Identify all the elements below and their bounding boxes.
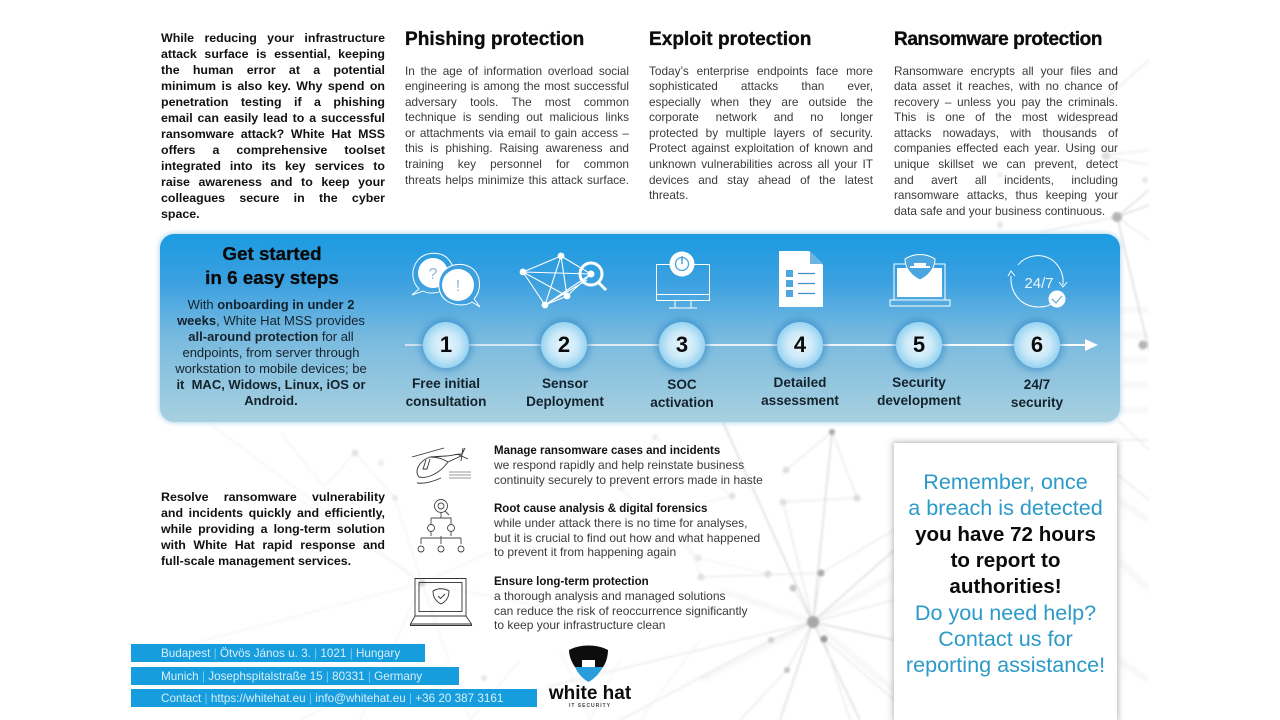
heading: phishing protection: Phishing protection [405, 28, 584, 50]
panel description: it MAC, Widows, Linux, iOS or [176, 377, 366, 392]
text: root cause analysis: Root cause analysis & digital forensics [494, 502, 707, 514]
icon: monitor with power button [656, 252, 710, 308]
rapid response paragraph [161, 490, 385, 568]
step 2 label: Deployment [526, 394, 604, 409]
callout text: remember [908, 468, 1103, 520]
logo shield [569, 646, 608, 682]
panel description [175, 297, 367, 408]
intro paragraph: the human error at a potential [161, 63, 385, 77]
callout text: remember: a breach is detected [908, 495, 1103, 520]
text: phishing protection: technique is sending out malicious links [405, 110, 629, 124]
callout card [894, 443, 1117, 720]
text: manage ransomware cases [494, 444, 763, 487]
intro paragraph [161, 31, 385, 221]
logo wordmark: white hat [549, 683, 631, 704]
step 5 label [877, 375, 961, 408]
step 6 number [1014, 322, 1060, 368]
icon: question and exclamation bubbles: ! [456, 278, 460, 295]
step 3 label [650, 376, 714, 410]
rapid response paragraph: and incidents quickly and efficiently, [161, 506, 385, 520]
text: exploit protection: protected by multiple layers of security. [649, 126, 873, 140]
icon: helicopter [412, 448, 471, 484]
panel title [205, 243, 339, 288]
intro paragraph: ransomware attack? White Hat MSS [161, 127, 385, 141]
step 5 number: 5 [913, 332, 925, 357]
step 1 label [406, 376, 486, 409]
step 6 number: 6 [1031, 332, 1043, 357]
intro paragraph: minimum is also key. Why spend on [161, 79, 385, 93]
step 2 label: Sensor [542, 376, 588, 391]
text: ensure long-term protection: a thorough analysis and managed solutions [494, 589, 726, 603]
step 1 number [423, 322, 469, 368]
step 4 number: 4 [794, 332, 806, 357]
text: ransomware protection: data safe and your business continuous. [894, 204, 1105, 218]
step 1 label: consultation [406, 394, 486, 409]
rapid response paragraph: Resolve ransomware vulnerability [161, 490, 385, 504]
rapid response paragraph: with White Hat rapid response and [161, 538, 385, 552]
icon: checklist document [779, 251, 823, 307]
text: exploit protection: threats. [649, 188, 688, 202]
text: manage ransomware cases: Manage ransomware cases and incidents [494, 444, 720, 456]
text: phishing protection: engineering is among the most successful [405, 79, 629, 93]
intro paragraph: attack surface is essential, keeping [161, 47, 385, 61]
callout text: 72 hours: authorities! [949, 575, 1062, 598]
contact bar: Munich: Munich | Josephspitalstraße 15 | 80331 | Germany [161, 670, 422, 682]
icon: laptop with shield outline [410, 578, 472, 626]
text: phishing protection: training key personnel for common [405, 157, 629, 171]
panel background [160, 234, 1120, 422]
heading: ransomware protection: Ransomware protection [894, 28, 1102, 50]
step 5 label: development [877, 393, 961, 408]
intro paragraph: colleagues secure in the cyber [161, 191, 385, 205]
text: exploit protection: Today’s enterprise endpoints face more [649, 64, 873, 78]
callout text: 72 hours: to report to [951, 549, 1060, 572]
panel description: weeks, White Hat MSS provides [177, 313, 365, 328]
panel description: Android. [244, 393, 298, 408]
text: ensure long-term protection: to keep your infrastructure clean [494, 618, 665, 632]
icon: 24/7 cycle with check [1008, 255, 1068, 308]
contact bar: Budapest [131, 644, 425, 662]
text: ransomware protection [894, 64, 1118, 218]
step 3 label: SOC [667, 376, 697, 392]
text: phishing protection: or attachments via email to gain access – [405, 126, 629, 140]
callout text: 72 hours [915, 523, 1096, 598]
text: root cause analysis: to prevent it from happening again [494, 545, 676, 559]
step 4 label [761, 375, 839, 408]
text: exploit protection: devices and stay ahead of the latest [649, 173, 873, 187]
icon: network with magnifier [520, 252, 607, 308]
panel description: endpoints, from server through [182, 345, 360, 360]
callout text: contact us: Do you need help? [915, 600, 1096, 624]
intro paragraph: While reducing your infrastructure [161, 31, 385, 45]
logo tagline: IT SECURITY [569, 703, 611, 709]
icon: 24/7 cycle with check: 24/7 [1024, 275, 1054, 292]
text: exploit protection: Protect against exploitation of known and [649, 141, 873, 155]
text: manage ransomware cases: continuity securely to prevent errors made in haste [494, 473, 763, 487]
step 1 label: Free initial [412, 376, 480, 391]
text: phishing protection: this is phishing. Raising awareness and [405, 141, 629, 155]
icon: root cause tree [418, 499, 464, 552]
timeline arrow [405, 339, 1098, 351]
step 3 number: 3 [676, 332, 688, 357]
panel description: With onboarding in under 2 [188, 297, 354, 312]
panel description: workstation to mobile devices; be [175, 361, 367, 376]
intro paragraph: raise awareness and to keep your [161, 175, 385, 189]
contact bar: Munich [131, 666, 459, 684]
text: root cause analysis [494, 502, 760, 559]
text: root cause analysis: but it is crucial to find out how and what happened [494, 531, 760, 545]
callout text: contact us: reporting assistance! [906, 652, 1105, 677]
step 4 label: Detailed [774, 375, 826, 390]
step 6 label: security [1011, 395, 1063, 410]
text: exploit protection: sophisticated attacks than ever, [649, 79, 873, 93]
intro paragraph: integrated into its key services to [161, 159, 385, 173]
panel description: all-around protection for all [188, 329, 354, 344]
panel title: Get started [222, 243, 322, 264]
intro paragraph: offers a comprehensive toolset [161, 143, 385, 157]
background network pattern [351, 60, 1149, 720]
text: ransomware protection: companies effected each year. Using our [894, 141, 1118, 155]
step 5 number [896, 322, 942, 368]
text: phishing protection: adversary tools. The most common [405, 95, 629, 109]
text: ransomware protection: Ransomware encrypts all your files and [894, 64, 1118, 78]
callout text: 72 hours: you have 72 hours [915, 523, 1096, 546]
text: ransomware protection: attacks nowadays, with thousands of [894, 126, 1118, 140]
text: ransomware protection: recovery – unless you pay the criminals. [894, 95, 1118, 109]
text: ensure long-term protection: Ensure long-term protection [494, 576, 649, 588]
text: phishing protection: threats helps minimize this attack surface. [405, 173, 629, 187]
text: root cause analysis: while under attack there is no time for analyses, [494, 516, 747, 530]
text: ransomware protection: unique skillset we can prevent, detect [894, 157, 1118, 171]
step 4 number [777, 322, 823, 368]
rapid response paragraph: while providing a long-term solution [161, 522, 385, 536]
text: ransomware protection: and avert all incidents, including [894, 173, 1118, 187]
step 2 number: 2 [558, 332, 570, 357]
rapid response paragraph: full-scale management services. [161, 554, 351, 568]
step 2 number [541, 322, 587, 368]
step 1 number: 1 [440, 332, 452, 357]
step 3 number [659, 322, 705, 368]
step 6 label [1011, 377, 1063, 410]
text: ensure long-term protection [494, 576, 748, 632]
text: phishing protection [405, 64, 629, 187]
step 6 label: 24/7 [1024, 377, 1050, 392]
icon: laptop with shield [890, 254, 950, 306]
intro paragraph: email can easily lead to a successful [161, 111, 385, 125]
text: ransomware protection: data asset it reaches, with no chance of [894, 79, 1118, 93]
step 5 label: Security [892, 375, 946, 390]
heading: exploit protection: Exploit protection [649, 28, 811, 50]
text: ransomware protection: This is one of the most widespread [894, 110, 1118, 124]
intro paragraph: space. [161, 207, 200, 221]
callout text: contact us: Contact us for [938, 626, 1073, 651]
contact bar: contact details: Contact | https://whitehat.eu | info@whitehat.eu | +36 20 387 3161 [161, 692, 503, 705]
text: exploit protection: unknown vulnerabilities across all your IT [649, 157, 873, 171]
contact bar: Budapest: Budapest | Ötvös János u. 3. | 1021 | Hungary [161, 647, 400, 660]
text: exploit protection: especially when they are outside the [649, 95, 873, 109]
text: ransomware protection: ransomware attacks, thus keeping your [894, 188, 1118, 202]
intro paragraph: penetration testing if a phishing [161, 95, 385, 109]
text: ensure long-term protection: can reduce the risk of reoccurrence significantly [494, 604, 747, 618]
logo: white hat IT security [548, 646, 631, 709]
callout text: remember: Remember, once [923, 468, 1088, 494]
text: exploit protection: corporate network and no longer [649, 110, 873, 124]
step 2 label [526, 376, 604, 409]
text: manage ransomware cases: we respond rapidly and help reinstate business [494, 458, 744, 472]
icon: question and exclamation bubbles [412, 252, 480, 308]
callout text: contact us [906, 600, 1105, 677]
contact bar: contact details [131, 689, 537, 707]
panel title: in 6 easy steps [205, 267, 339, 288]
icon: question and exclamation bubbles: ? [429, 266, 438, 283]
step 4 label: assessment [761, 393, 839, 408]
step 3 label: activation [650, 394, 714, 410]
text: phishing protection: In the age of information overload social [405, 64, 629, 78]
text: exploit protection [649, 64, 873, 202]
